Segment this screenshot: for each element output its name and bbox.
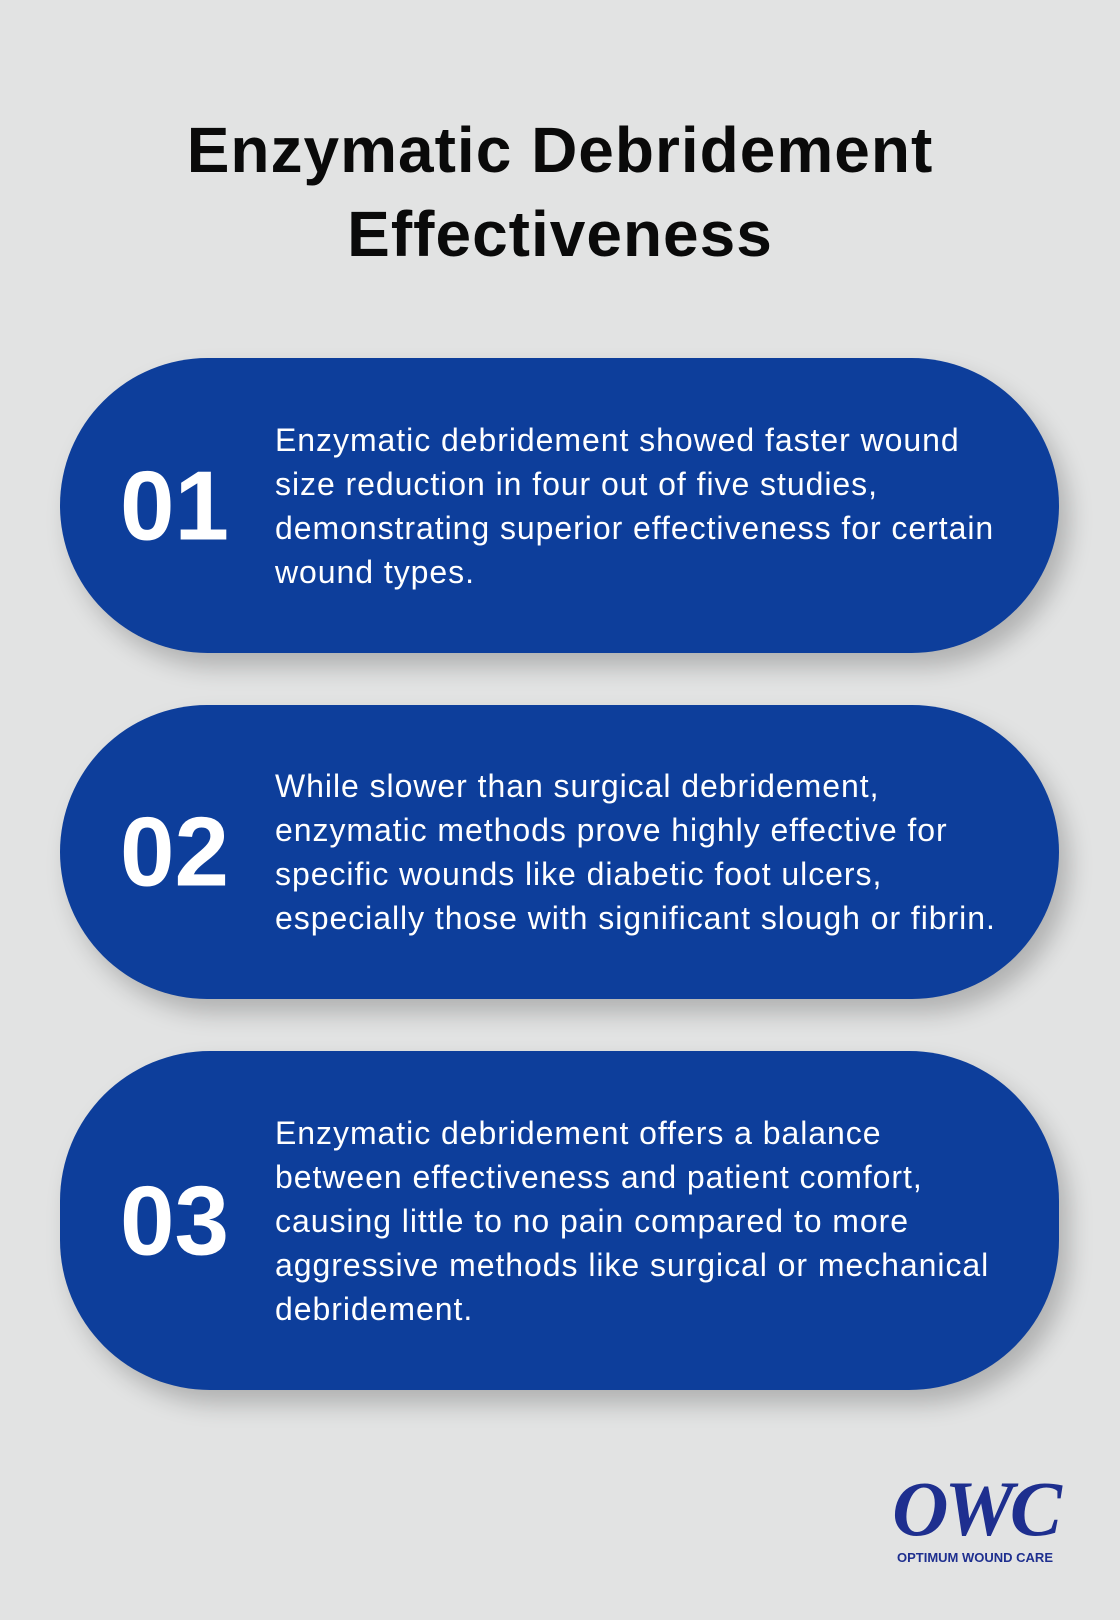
number 02: 02 [120, 796, 229, 906]
panel: point 02 [60, 705, 1059, 999]
title: Enzymatic Debridement [187, 114, 933, 186]
text 01: Enzymatic debridement showed faster wound [275, 422, 960, 458]
text 02 [275, 768, 996, 936]
logo: OWC [892, 1465, 1058, 1552]
text 03: causing little to no pain compared to more [275, 1202, 909, 1238]
number 03: 03 [120, 1165, 229, 1275]
logo: OPTIMUM WOUND CARE [897, 1550, 1053, 1565]
text 03: Enzymatic debridement offers a balance [275, 1114, 882, 1150]
text 02: While slower than surgical debridement, [275, 768, 879, 804]
number 01: 01 [120, 450, 229, 560]
text 02: enzymatic methods prove highly effective for [275, 812, 948, 848]
text 03: between effectiveness and patient comfort, [275, 1158, 923, 1194]
text 03: aggressive methods like surgical or mechanical [275, 1246, 989, 1282]
text 03 [275, 1114, 989, 1326]
text 01 [275, 422, 994, 590]
text 01: demonstrating superior effectiveness for certain [275, 510, 994, 546]
text 02: specific wounds like diabetic foot ulcers, [275, 856, 882, 892]
text 02: especially those with significant slough or fibrin. [275, 900, 996, 936]
panel: point 01 [60, 358, 1059, 653]
text 01: size reduction in four out of five studies, [275, 466, 878, 502]
title: Effectiveness [347, 198, 773, 270]
panel: point 03 [60, 1051, 1059, 1390]
text 01: wound types. [275, 554, 475, 590]
title [187, 114, 933, 270]
text 03: debridement. [275, 1290, 473, 1326]
